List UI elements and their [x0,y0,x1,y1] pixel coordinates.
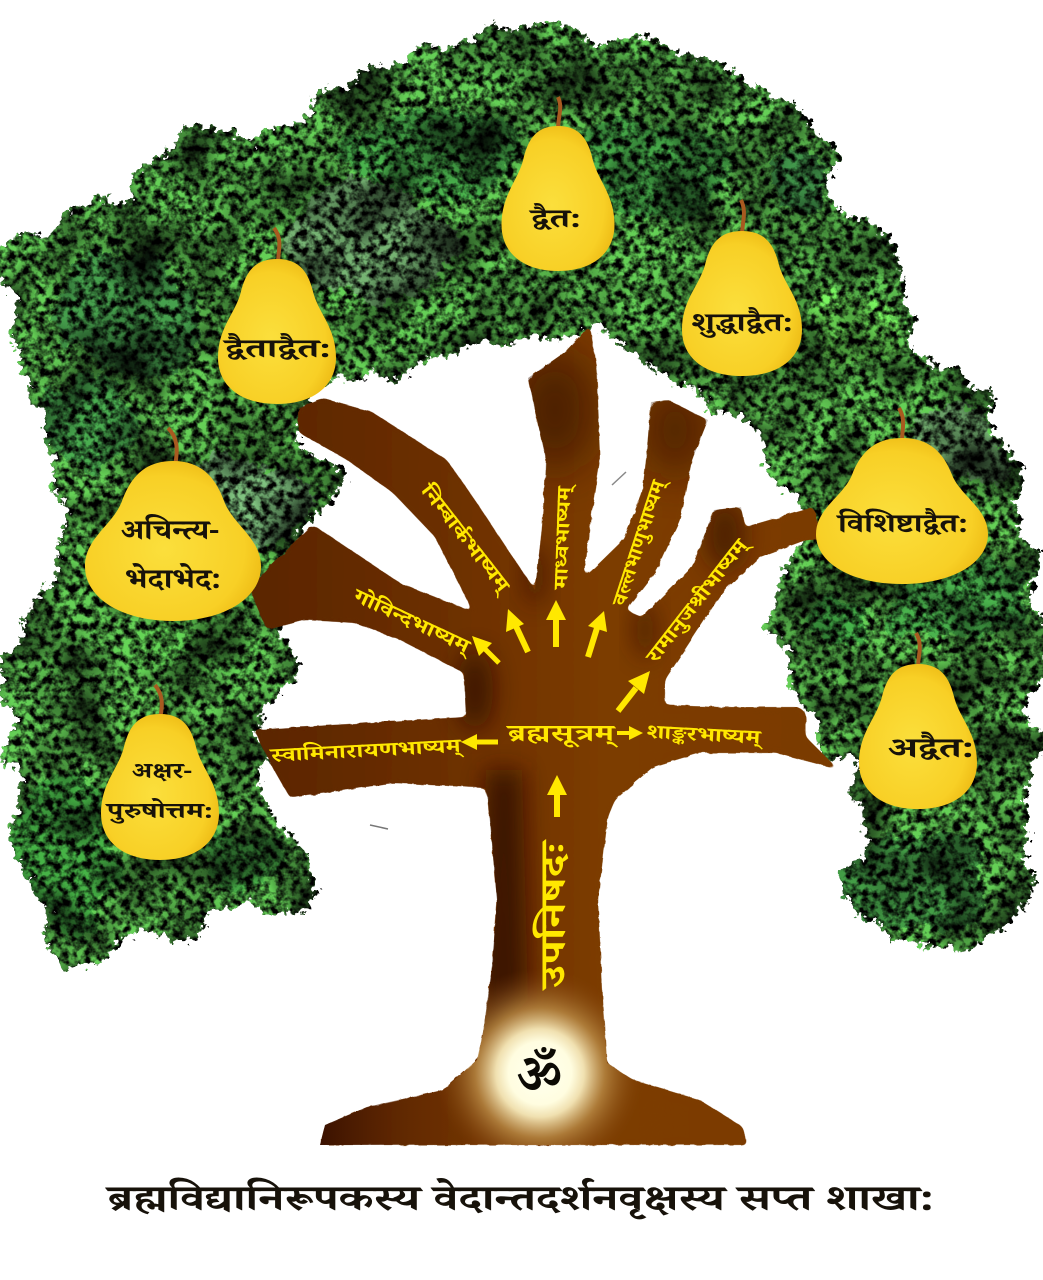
arrow: to Vallabha [588,611,607,657]
pear: Dvaita [502,97,614,271]
tree trunk and seven branches [251,325,840,1150]
label: Upanishad: उपनिषदः [532,839,588,992]
label: Swaminarayan commentary: स्वामिनारायणभाष्यम् [268,733,465,775]
arrow: Upanishad to Brahmasutra [547,775,567,817]
label: Vallabha commentary: वल्लभाणुभाष्यम् [606,475,678,613]
pear: Akshara-Purushottama: अक्षर- [132,758,192,792]
label: Govinda commentary: गोविन्दभाष्यम् [345,582,477,667]
label: Ramanuja commentary: रामानुजश्रीभाष्यम् [639,532,760,674]
pear: Dvaita: द्वैत: [528,203,581,244]
foliage canopy [0,22,1043,975]
label: Brahmasutra: ब्रह्मसूत्रम् [505,719,619,756]
pear: Shuddhadvaita [682,200,802,376]
arrows from Brahmasutra to commentaries [461,600,650,817]
arrow: to Ramanuja [618,671,650,711]
arrow: to Swaminarayan [461,734,498,750]
trunk and branch labels [268,475,764,992]
pear: Vishishtadvaita [816,408,988,584]
title: ब्रह्मविद्यानिरूपकस्य वेदान्तदर्शनवृक्षस्य सप्त शाखा: [104,1177,934,1233]
arrow: to Shankara [617,726,643,740]
stray specks [370,472,626,829]
arrow: to Govinda [472,636,499,663]
pear: Akshara-Purushottama: पुरुषोत्तम: [104,798,213,832]
pear: Akshara-Purushottama [101,685,219,860]
pear: Achintya-Bhedabheda: अचिन्त्य- [121,513,219,557]
label: Shankara commentary: शाङ्करभाष्यम् [645,719,764,757]
pear: Advaita [859,633,977,809]
label: Madhva commentary: माध्वभाष्यम् [548,483,584,592]
arrow: to Madhva [546,600,566,647]
pear: Dvaitadvaita: द्वैताद्वैत: [222,333,331,374]
pear: Achintya-Bhedabheda: भेदाभेद: [125,562,221,606]
pear: Vishishtadvaita: विशिष्टाद्वैत: [835,508,968,549]
pear: Dvaitadvaita [218,228,336,404]
icon: Om on glowing trunk base: ॐ [515,1044,563,1122]
label: Nimbarka commentary: निम्बार्कभाष्यम् [408,477,517,604]
pear: Achintya-Bhedabheda [85,428,261,621]
arrow: to Nimbarka [506,609,528,652]
pear: Shuddhadvaita: शुद्धाद्वैत: [691,307,793,348]
pear: Advaita: अद्वैत: [888,731,974,775]
